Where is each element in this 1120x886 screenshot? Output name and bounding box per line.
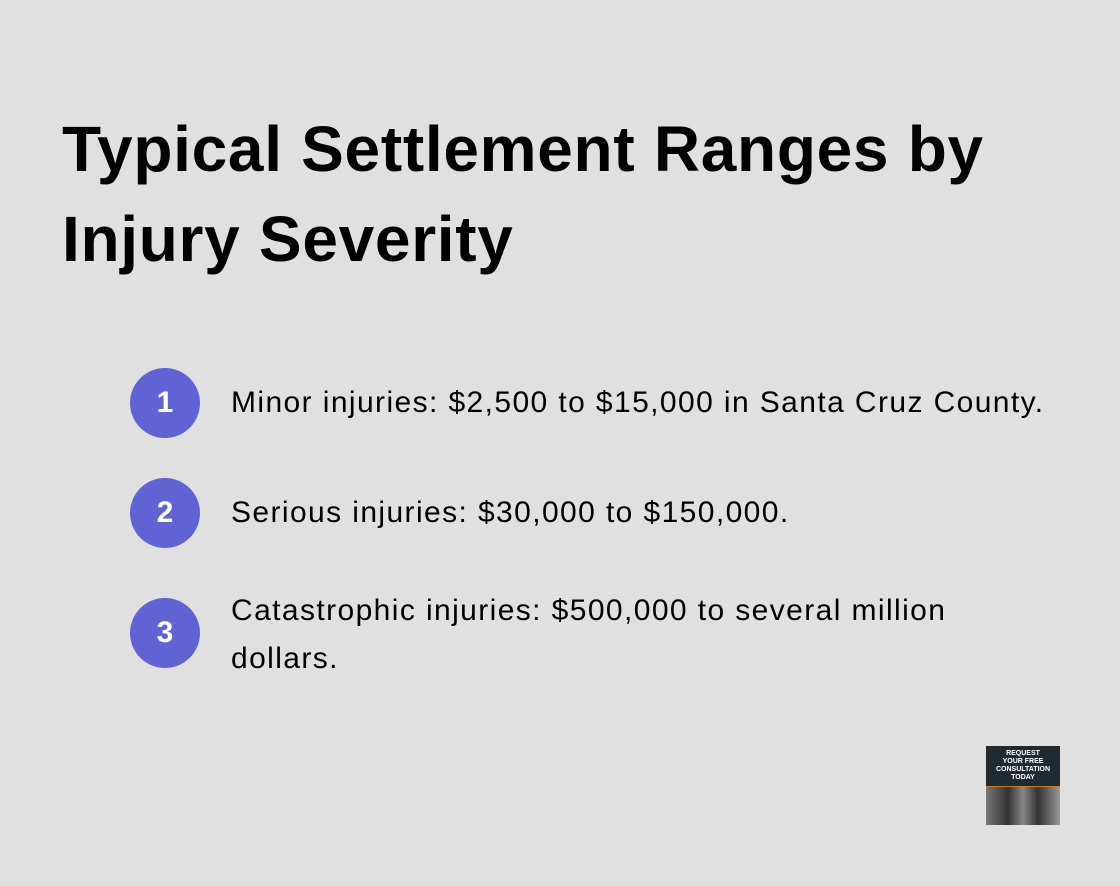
item 2 [130,478,790,548]
title [62,113,984,275]
text 1: Minor injuries: $2,500 to $15,000 in Santa Cruz County. [231,386,1045,419]
consultation badge: CONSULTATION [996,766,1050,773]
number badge 2: 2 [157,496,173,529]
consultation badge: TODAY [1011,774,1035,781]
consultation badge: REQUEST [1006,750,1040,757]
number badge 1 [130,368,200,438]
title: Injury Severity [62,203,514,275]
item 3 [130,594,946,675]
consultation badge: YOUR FREE [1003,758,1043,765]
number badge 3 [130,598,200,668]
item 1 [130,368,1045,438]
text 2: Serious injuries: $30,000 to $150,000. [231,496,790,529]
consultation badge [986,746,1060,825]
text 3: Catastrophic injuries: $500,000 to several million dollars. [231,594,946,675]
number badge 3: 3 [157,616,173,649]
number badge 1: 1 [157,386,173,419]
title: Typical Settlement Ranges by [62,113,984,185]
number badge 2 [130,478,200,548]
